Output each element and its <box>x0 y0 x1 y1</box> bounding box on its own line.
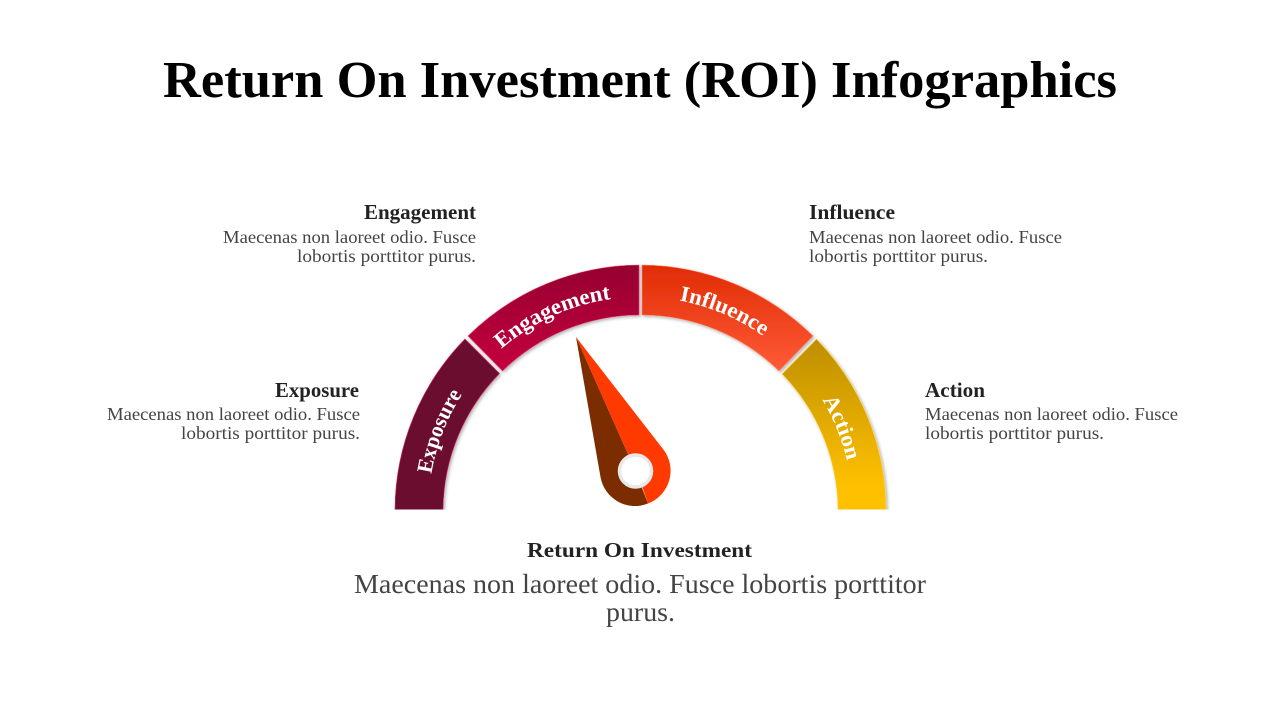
heading: Engagement: Engagement <box>364 200 476 224</box>
description: Action: Maecenas non laoreet odio. Fusce <box>925 404 1178 424</box>
needle hub <box>620 455 652 487</box>
heading: Action: Action <box>925 378 985 402</box>
text block: Influence: lobortis porttitor purus. <box>809 246 988 266</box>
needle: bright half <box>576 337 671 504</box>
gauge <box>394 264 890 510</box>
description: Exposure: Maecenas non laoreet odio. Fusce <box>107 404 360 424</box>
needle <box>576 337 671 506</box>
text block: Return On Investment <box>354 538 926 627</box>
heading: Return On Investment: Return On Investment <box>527 538 752 562</box>
description: Engagement: Maecenas non laoreet odio. Fusce <box>223 227 476 247</box>
segment: Engagement: Engagement <box>492 287 611 349</box>
heading: Influence: Influence <box>809 200 895 224</box>
description: Return On Investment: Maecenas non laoreet odio. Fusce lobortis porttitor <box>354 569 926 599</box>
text block: Engagement <box>223 200 476 266</box>
description: Influence: Maecenas non laoreet odio. Fusce <box>809 227 1062 247</box>
text block: Exposure: lobortis porttitor purus. <box>181 423 360 443</box>
text block: Return On Investment: purus. <box>606 597 675 627</box>
segment: Exposure: Exposure <box>417 390 462 474</box>
text block: Action: lobortis porttitor purus. <box>925 423 1104 443</box>
segment: Influence: Influence <box>680 286 768 336</box>
text block: Influence <box>809 200 1062 266</box>
text block: Exposure <box>107 378 360 443</box>
segment: Influence <box>642 264 816 374</box>
text block: Action <box>925 378 1178 443</box>
needle: dark half <box>576 337 648 506</box>
segment: Engagement <box>468 264 642 374</box>
heading: Exposure: Exposure <box>275 378 359 402</box>
segment: Action: Action <box>822 398 856 460</box>
segment: Action <box>782 338 890 510</box>
title: Return On Investment (ROI) Infographics <box>163 52 1117 109</box>
text block: Engagement: lobortis porttitor purus. <box>297 246 476 266</box>
segment: Exposure <box>394 338 502 510</box>
